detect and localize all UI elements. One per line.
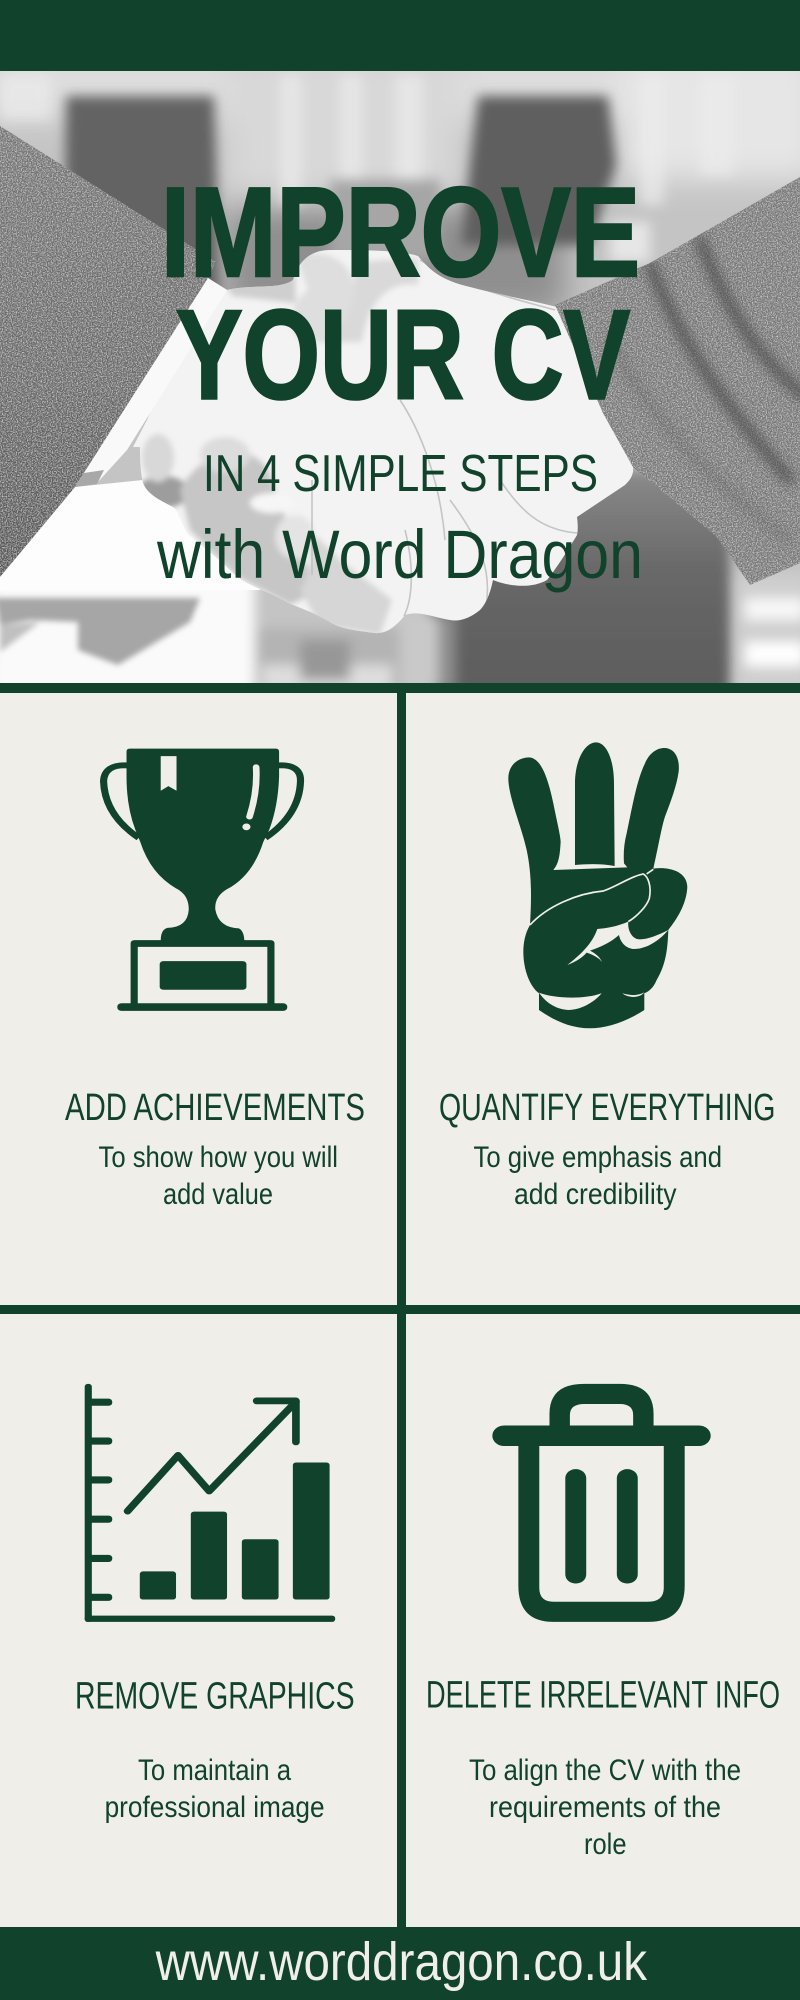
hero photo: handshake	[0, 50, 800, 695]
description: add achievements: add value	[163, 1178, 273, 1211]
description: remove graphics	[105, 1754, 325, 1824]
description: delete irrelevant info: role	[584, 1828, 626, 1861]
title: IMPROVE	[161, 161, 640, 303]
subtitle: in 4 simple steps: IN 4 SIMPLE STEPS	[203, 445, 598, 503]
description: delete irrelevant info	[469, 1754, 741, 1861]
left sleeve	[0, 126, 216, 577]
description: quantify everything: To give emphasis and	[474, 1141, 722, 1174]
subtitle: with Word Dragon: with Word Dragon	[156, 516, 643, 593]
description: remove graphics: To maintain a	[138, 1754, 291, 1787]
footer website address: www.worddragon.co.uk	[155, 1932, 648, 1992]
description: remove graphics: professional image	[105, 1791, 325, 1824]
hands	[120, 240, 650, 640]
grid lines between panels	[0, 683, 800, 1927]
left chair	[64, 96, 220, 300]
icon: hand showing three fingers	[508, 742, 687, 1028]
description: delete irrelevant info: To align the CV with the	[469, 1754, 741, 1787]
top banner bar	[0, 0, 800, 71]
panel: quantify everything	[439, 742, 776, 1211]
description: add achievements: To show how you will	[98, 1141, 338, 1174]
description: delete irrelevant info: requirements of the	[489, 1791, 721, 1824]
icon: bar chart with rising arrow	[85, 1384, 335, 1622]
panel: delete irrelevant info	[426, 1384, 780, 1861]
heading: remove graphics: REMOVE GRAPHICS	[75, 1676, 355, 1718]
title	[161, 161, 640, 426]
dark floor, lower right	[430, 222, 730, 695]
panel: add achievements	[65, 749, 365, 1211]
panel: remove graphics	[75, 1384, 355, 1824]
right sleeve	[555, 177, 800, 585]
right chair	[462, 96, 616, 245]
description: quantify everything: add credibility	[514, 1178, 676, 1211]
footer bar	[0, 1927, 800, 2000]
title: YOUR CV	[176, 284, 630, 426]
description: quantify everything	[474, 1141, 722, 1211]
icon: trash bin	[492, 1384, 711, 1622]
description: add achievements	[98, 1141, 338, 1211]
heading: add achievements: ADD ACHIEVEMENTS	[65, 1087, 365, 1129]
icon: trophy	[104, 749, 301, 1011]
shirt cuff left	[75, 278, 227, 487]
